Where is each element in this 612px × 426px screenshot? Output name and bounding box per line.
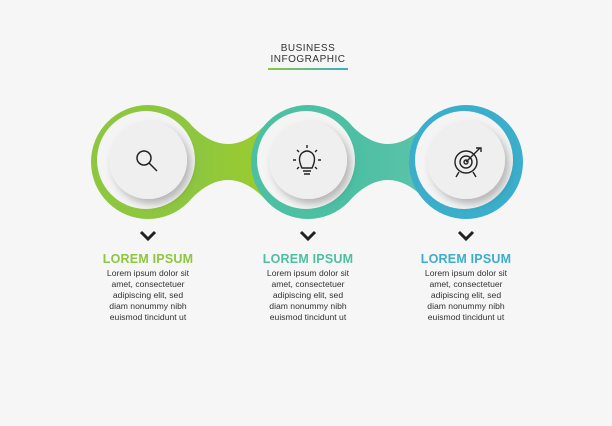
title: BUSINESS	[281, 43, 335, 54]
text: col 1: amet, consectetuer	[111, 279, 185, 289]
text: col 3: Lorem ipsum dolor sit	[425, 268, 507, 278]
text: col 1: Lorem ipsum dolor sit	[107, 268, 189, 278]
connector 2	[352, 126, 424, 198]
text: col 2: LOREM IPSUM	[263, 252, 353, 266]
text: col 3: diam nonummy nibh	[427, 301, 505, 311]
text: col 3	[421, 252, 511, 322]
circle 2	[251, 105, 365, 219]
title	[268, 43, 348, 70]
text: col 2: diam nonummy nibh	[269, 301, 347, 311]
text: col 3: LOREM IPSUM	[421, 252, 511, 266]
text: col 2: euismod tincidunt ut	[270, 312, 346, 322]
text: col 2: adipiscing elit, sed	[273, 290, 343, 300]
text: col 1: euismod tincidunt ut	[110, 312, 186, 322]
circle 1	[91, 105, 205, 219]
connector 1	[192, 126, 264, 198]
chevrons	[141, 232, 473, 239]
icon: magnifier	[137, 151, 157, 171]
text: col 1	[103, 252, 193, 322]
text: col 1: adipiscing elit, sed	[113, 290, 183, 300]
text: col 3: euismod tincidunt ut	[428, 312, 504, 322]
icon: target	[455, 148, 481, 177]
icon: bulb	[293, 145, 321, 174]
text: col 3: adipiscing elit, sed	[431, 290, 501, 300]
title: INFOGRAPHIC	[271, 54, 345, 65]
text: col 2: Lorem ipsum dolor sit	[267, 268, 349, 278]
circle 3	[409, 105, 523, 219]
text: col 3: amet, consectetuer	[429, 279, 503, 289]
text: col 2: amet, consectetuer	[271, 279, 345, 289]
text: col 1: LOREM IPSUM	[103, 252, 193, 266]
text: col 2	[263, 252, 353, 322]
text: col 1: diam nonummy nibh	[109, 301, 187, 311]
